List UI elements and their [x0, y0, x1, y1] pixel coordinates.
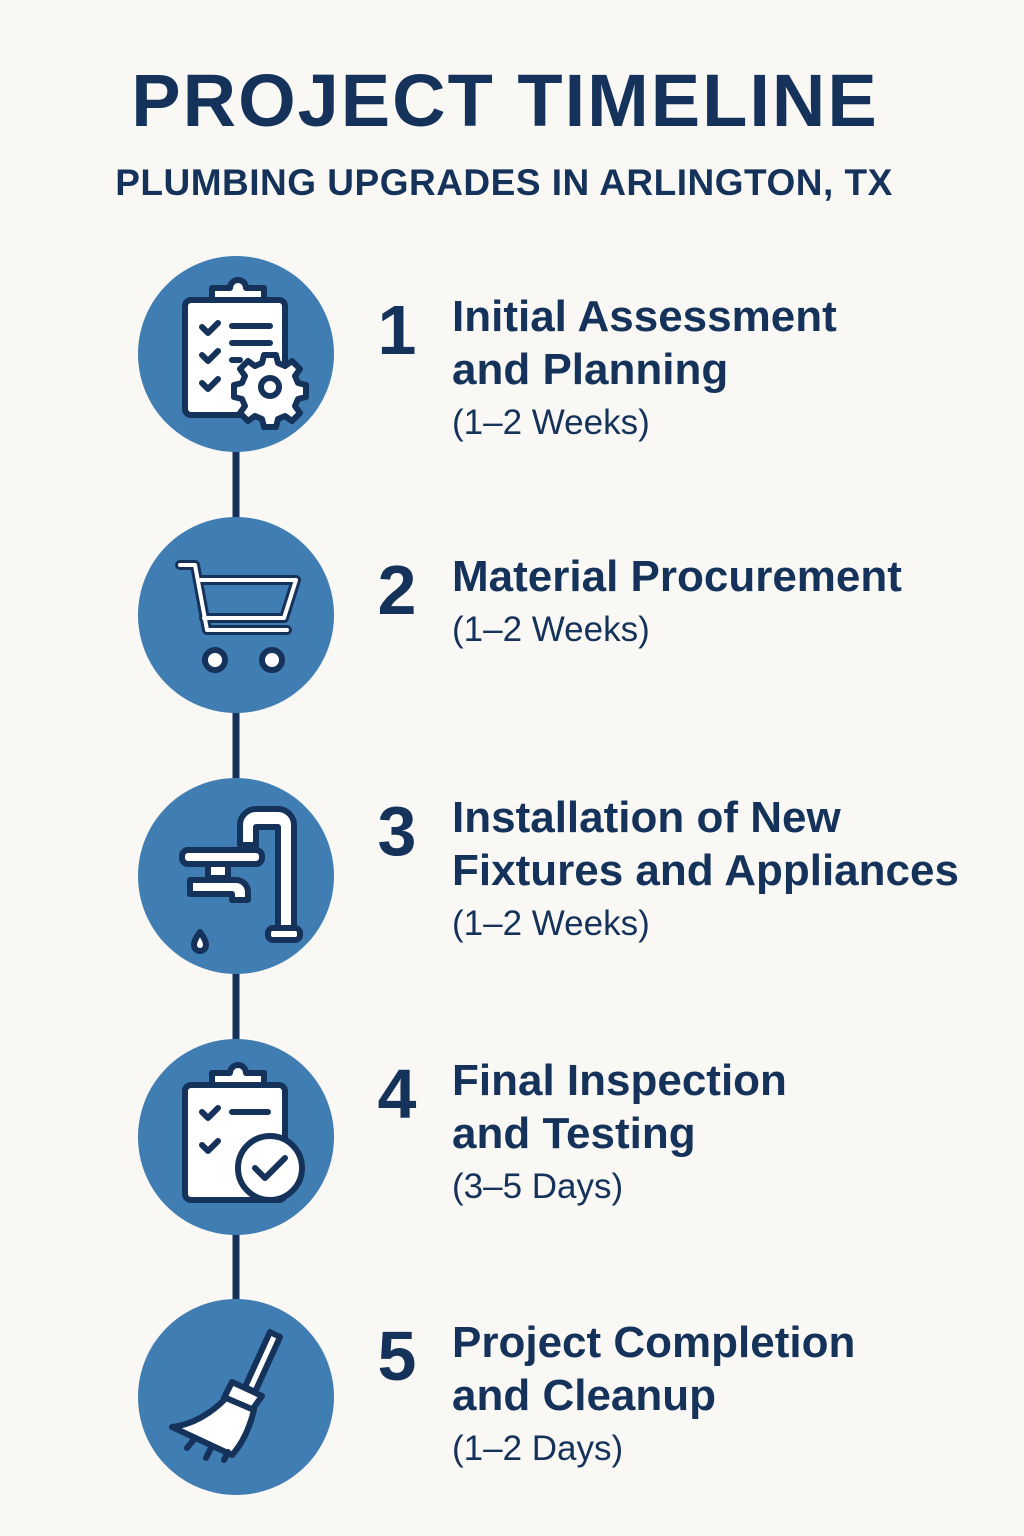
step 4: 4: [378, 1055, 416, 1133]
step 2: (1–2 Weeks): [452, 610, 650, 649]
title: PROJECT TIMELINE: [131, 59, 879, 142]
step 5: 5: [378, 1317, 416, 1395]
step 2: [378, 551, 902, 649]
step 3: Fixtures and Appliances: [452, 846, 959, 895]
step 2: 2: [378, 551, 416, 629]
timeline icons column: [138, 256, 334, 1495]
step 4: [378, 1055, 787, 1206]
step 1: and Planning: [452, 345, 728, 394]
step 5: Project Completion: [452, 1318, 855, 1367]
icon: broom: [138, 1299, 334, 1495]
step 3: (1–2 Weeks): [452, 904, 650, 943]
icon: clipboard with check: [138, 1039, 334, 1235]
icon: faucet: [138, 778, 334, 974]
step 4: and Testing: [452, 1109, 696, 1158]
step 3: [378, 792, 959, 943]
icon: cart: [138, 517, 334, 713]
step 5: [378, 1317, 855, 1468]
subtitle: PLUMBING UPGRADES IN ARLINGTON, TX: [115, 162, 893, 203]
step 3: 3: [378, 792, 416, 870]
step 1: [378, 291, 837, 442]
step 4: Final Inspection: [452, 1056, 787, 1105]
step 3: Installation of New: [452, 793, 841, 842]
step 1: 1: [378, 291, 416, 369]
step 2: Material Procurement: [452, 552, 902, 601]
icon: clipboard with gear: [138, 256, 334, 452]
step 5: (1–2 Days): [452, 1429, 623, 1468]
step 1: (1–2 Weeks): [452, 403, 650, 442]
step 5: and Cleanup: [452, 1371, 716, 1420]
step 4: (3–5 Days): [452, 1167, 623, 1206]
step 1: Initial Assessment: [452, 292, 837, 341]
